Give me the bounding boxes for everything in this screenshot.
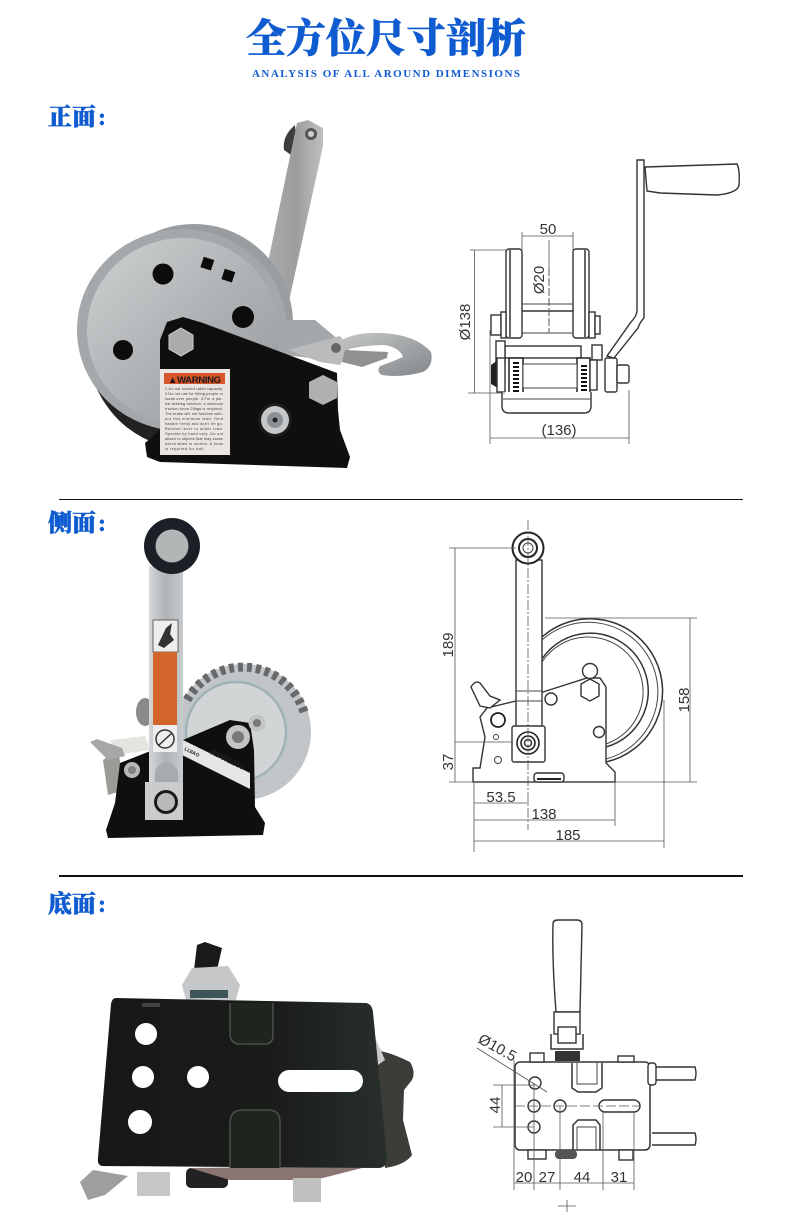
lever arm bbox=[268, 120, 323, 310]
ratchet and base bbox=[491, 358, 597, 413]
warning label: 2.Do not use for lifting people or bbox=[165, 392, 224, 396]
dimension: 53.5: 53.5 bbox=[486, 789, 516, 806]
lower bolts bbox=[80, 1166, 370, 1202]
hex bolt upper bbox=[169, 328, 193, 356]
warning label bbox=[160, 369, 230, 455]
bracket outline bbox=[473, 678, 615, 782]
warning label: Operate by hand only. Do not bbox=[165, 432, 223, 436]
handle bbox=[551, 920, 583, 1061]
handle end bbox=[512, 532, 544, 564]
dimension: diameter 138: Ø138 bbox=[457, 304, 474, 340]
warning label: attach to objects that may cause bbox=[165, 437, 223, 441]
hex bolt lower bbox=[309, 375, 337, 405]
warning label: traction force 25kgs is required. bbox=[165, 407, 223, 411]
dimension: 31: 31 bbox=[611, 1169, 627, 1186]
hook and latch bbox=[285, 320, 432, 376]
dimension: 138: 138 bbox=[531, 806, 557, 823]
dimension: 27: 27 bbox=[539, 1169, 555, 1186]
heading: front view: 正面: bbox=[48, 104, 106, 131]
heading: side view: 侧面: bbox=[48, 509, 106, 537]
dimension: 37: 37 bbox=[440, 754, 457, 770]
warning label: out this minimum load. Hold bbox=[165, 417, 223, 421]
warning stickers on lever bbox=[153, 620, 178, 752]
drum flanges bbox=[506, 249, 589, 338]
dimension: 20: 20 bbox=[516, 1169, 532, 1186]
drawing: side dimensions bbox=[440, 520, 697, 852]
holes and bolts bbox=[491, 664, 604, 782]
pawl bbox=[471, 682, 500, 708]
dimension: 189: 189 bbox=[440, 632, 457, 658]
photo: winch bottom view bbox=[80, 942, 414, 1202]
dark spool underside bbox=[95, 370, 175, 445]
dimension: diameter 10.5: Ø10.5 bbox=[475, 1031, 519, 1065]
title: 全方位尺寸剖析 bbox=[246, 16, 526, 61]
nuts on bracket bbox=[124, 714, 266, 778]
drawing: bottom dimensions bbox=[475, 920, 696, 1212]
drum seen from under bbox=[372, 1030, 414, 1168]
dimension lines bbox=[449, 520, 697, 852]
heading: bottom view: 底面: bbox=[48, 890, 106, 918]
black side bracket bbox=[145, 317, 350, 468]
dimension lines bbox=[468, 232, 629, 444]
dimension: 158: 158 bbox=[676, 687, 693, 713]
product label: RPW1200 bbox=[209, 748, 246, 772]
notches bbox=[572, 1063, 602, 1150]
base bolt bbox=[154, 790, 178, 814]
warning label: ▲WARNING bbox=[168, 375, 221, 386]
photo: winch front view bbox=[77, 120, 432, 468]
handle knob bbox=[144, 518, 200, 574]
bearing bbox=[258, 403, 292, 437]
dimension: 185: 185 bbox=[555, 827, 581, 844]
lever outline bbox=[512, 560, 545, 762]
divider bbox=[59, 498, 743, 500]
product label bbox=[182, 740, 250, 789]
body small bolts bbox=[528, 1053, 634, 1160]
drum front flange bbox=[77, 229, 287, 431]
warning label: tial braking function, a minimum bbox=[165, 402, 223, 406]
drawing: front dimensions bbox=[457, 160, 739, 444]
drum holes bbox=[113, 257, 254, 360]
black base plate with holes bbox=[98, 998, 387, 1168]
drum back flange bbox=[95, 224, 293, 424]
top knob and nut bbox=[182, 942, 240, 1000]
dimension: 136: (136) bbox=[541, 422, 577, 439]
crank handle bbox=[605, 160, 739, 392]
divider bbox=[59, 875, 743, 877]
warning label: 1.Do not exceed rated capacity. bbox=[165, 387, 223, 391]
dimension: 44 vertical: 44 bbox=[487, 1097, 504, 1113]
dimension lines bbox=[477, 1048, 640, 1212]
warning label: The brake will not function with- bbox=[165, 412, 224, 416]
photo: winch side view bbox=[90, 518, 311, 838]
drum arcs bbox=[542, 619, 663, 762]
subtitle: ANALYSIS OF ALL AROUND DIMENSIONS bbox=[252, 68, 520, 80]
product label: LIJIAO bbox=[183, 746, 200, 759]
warning label: handle firmly and don't let go. bbox=[165, 422, 223, 426]
dimension: diameter 20: Ø20 bbox=[531, 266, 548, 294]
dimension: 50: 50 bbox=[540, 221, 556, 238]
forks on right bbox=[648, 1063, 696, 1145]
warning label: Ratchet lever to under load. bbox=[165, 427, 223, 431]
dimension: 44 horizontal: 44 bbox=[574, 1169, 590, 1186]
black bracket bbox=[106, 720, 265, 838]
warning label: loads over people. 3.For a par- bbox=[165, 397, 224, 401]
bolts and cross bars bbox=[491, 312, 602, 363]
warning label: winch when in motion. A drum bbox=[165, 442, 223, 446]
pawl, rope and spool bbox=[90, 698, 154, 795]
lever bbox=[145, 566, 183, 820]
holes and slot bbox=[528, 1077, 640, 1133]
warning label: is required for ball. bbox=[165, 447, 205, 451]
gear wheel bbox=[175, 664, 311, 800]
body plate bbox=[515, 1062, 650, 1150]
